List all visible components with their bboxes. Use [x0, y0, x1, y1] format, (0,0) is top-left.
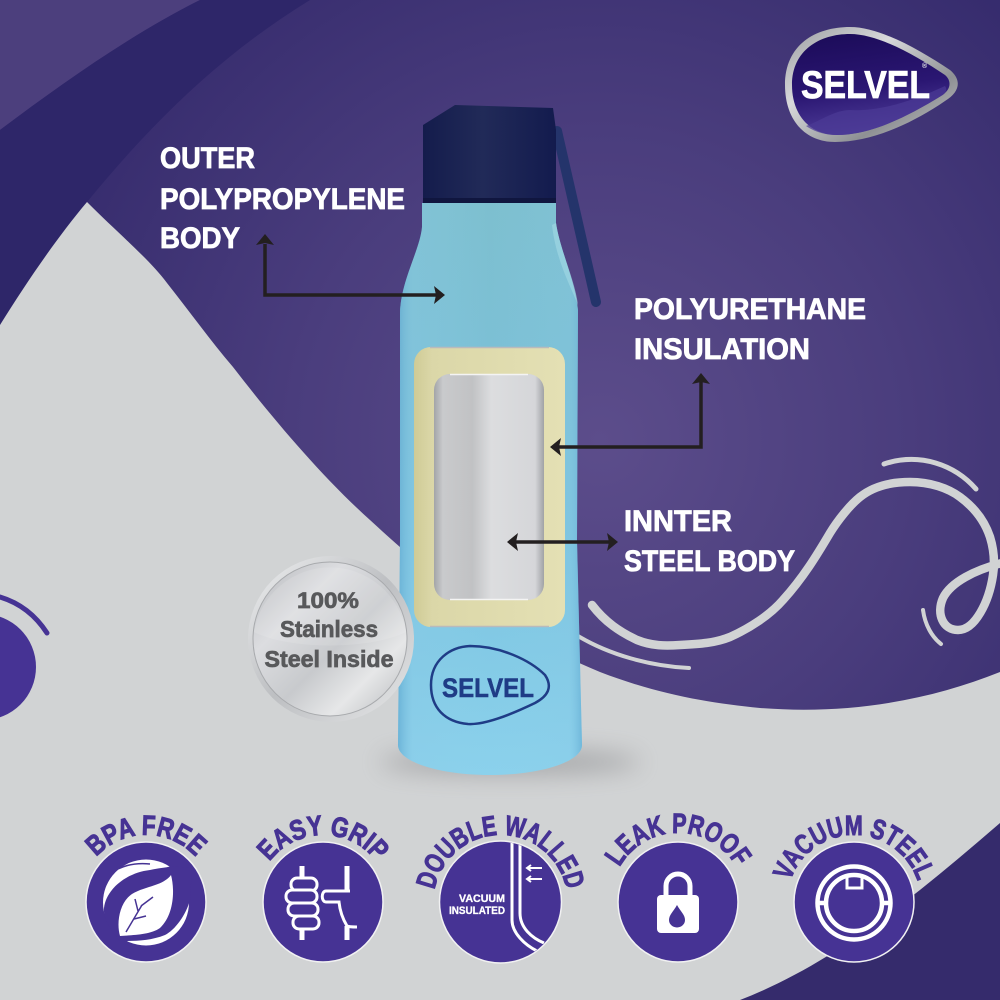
- bottle strap: [557, 131, 596, 302]
- icon: leaf: [103, 860, 192, 946]
- bottle cap: [423, 105, 556, 203]
- feature: vacuum steel: VACUUM STEEL: [772, 815, 933, 881]
- label: polyurethane insulation: [634, 293, 866, 366]
- label: outer polypropylene body: OUTER: [160, 142, 255, 175]
- icon: wall cross-section: VACUUM: [459, 893, 505, 905]
- inner steel window: [434, 374, 544, 600]
- label: outer polypropylene body: POLYPROPYLENE: [160, 183, 405, 216]
- arrow: outer body: [256, 234, 445, 304]
- left purple circle with arc: [0, 597, 47, 720]
- label: inner steel body: INNTER: [624, 505, 732, 538]
- brand logo: ®: [922, 62, 928, 70]
- arrow: insulation: [550, 373, 710, 456]
- bottle: [398, 105, 596, 775]
- label: polyurethane insulation: POLYURETHANE: [634, 293, 866, 326]
- icon: wall cross-section: [449, 840, 544, 951]
- feature: BPA free: [84, 815, 208, 963]
- label: outer polypropylene body: BODY: [160, 222, 240, 255]
- feature: vacuum steel: [772, 815, 933, 963]
- label: outer polypropylene body: [160, 142, 405, 255]
- icon: hand gripping bottle: [286, 866, 357, 940]
- icon: vacuum ring: [817, 866, 891, 940]
- stainless steel badge: [248, 556, 414, 722]
- feature: BPA free: BPA FREE: [84, 815, 208, 857]
- stainless steel badge: 100%: [297, 588, 359, 613]
- icon: padlock with drop: [657, 874, 699, 933]
- dark bottom-right corner: [740, 823, 1000, 1000]
- brand logo: [785, 27, 958, 142]
- top-left dark band: [0, 0, 310, 325]
- stainless steel badge: Stainless: [280, 616, 378, 642]
- label: inner steel body: STEEL BODY: [624, 545, 795, 578]
- bottle logo: [431, 646, 549, 724]
- feature: double walled: [416, 814, 584, 964]
- light grey wave: [0, 202, 1000, 1000]
- feature: leak proof: [604, 813, 753, 963]
- bottle logo: SELVEL: [442, 673, 534, 703]
- arrow: inner steel: [507, 533, 618, 551]
- top-left light corner shape: [0, 0, 200, 130]
- feature: double walled: DOUBLE WALLED: [416, 814, 584, 889]
- feature: easy grip: [256, 814, 388, 963]
- label: inner steel body: [624, 505, 795, 578]
- feature: easy grip: EASY GRIP: [256, 814, 388, 861]
- bottle body: [398, 203, 582, 775]
- insulation panel: [414, 347, 565, 627]
- brand logo: SELVEL: [801, 64, 930, 107]
- stainless steel badge: Steel Inside: [264, 646, 394, 672]
- feature: leak proof: LEAK PROOF: [604, 813, 753, 866]
- icon: wall cross-section: INSULATED: [449, 905, 505, 917]
- decorative swirl lines: [578, 459, 1000, 668]
- label: polyurethane insulation: INSULATION: [634, 333, 810, 366]
- bottle shadow: [380, 750, 640, 774]
